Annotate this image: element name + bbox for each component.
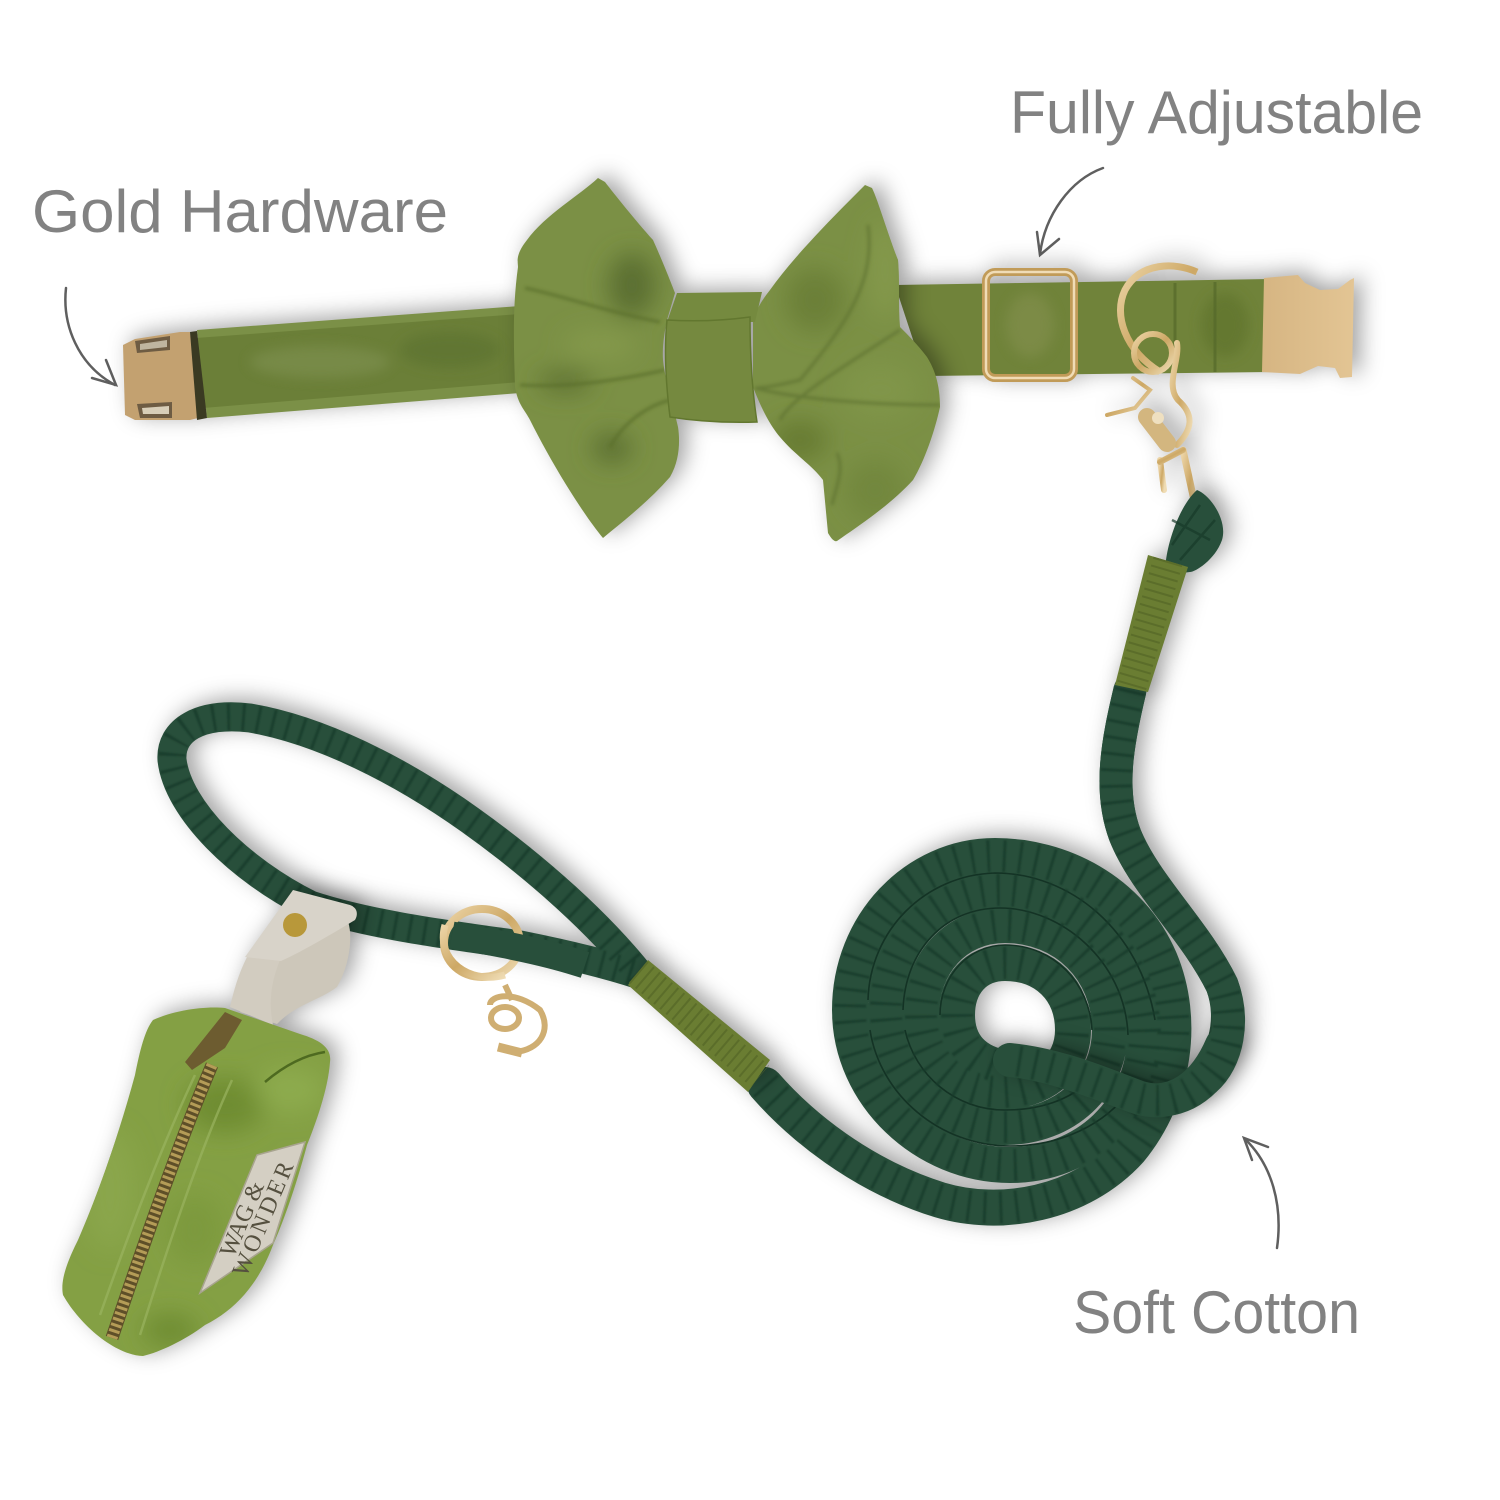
arrow: to gold buckle — [65, 288, 116, 385]
rope twist — [1010, 690, 1228, 1100]
leather suede back — [240, 915, 350, 1024]
label text: WAG & — [215, 1177, 270, 1261]
brass rivet — [283, 913, 307, 937]
arrow: to rope — [1244, 1138, 1279, 1248]
coil gaps — [868, 873, 1155, 1146]
collar pleats — [1175, 282, 1215, 372]
gold charm — [490, 985, 545, 1053]
slider ring — [986, 272, 1074, 378]
zipper pull — [185, 1012, 242, 1070]
bow knot — [666, 317, 757, 422]
collar band right — [895, 279, 1270, 376]
label: soft cotton: Soft Cotton — [1073, 1279, 1360, 1346]
bow left wing — [500, 170, 690, 550]
poop bag pouch — [50, 890, 357, 1365]
lower sleeve stitching — [638, 972, 760, 1076]
collar band left — [197, 306, 520, 418]
arrow: to adjuster — [1037, 168, 1103, 255]
handle rope — [172, 717, 640, 975]
rope segment down to coil — [1116, 690, 1227, 1088]
leash handle loop — [172, 717, 640, 975]
upper rope base — [1116, 690, 1227, 1088]
sleeve upper — [1115, 555, 1188, 692]
top knot and olive sleeve — [1115, 490, 1223, 692]
rope knot — [1165, 490, 1223, 575]
snap hook pivot — [1152, 412, 1164, 424]
sleeve herringbone — [1131, 561, 1168, 688]
coil spiral — [765, 856, 1173, 1208]
ring front — [443, 925, 505, 977]
sleeve lower — [628, 960, 770, 1092]
label text second line: WONDER — [228, 1158, 299, 1280]
knot twist — [1172, 505, 1215, 560]
rope solid — [1010, 690, 1228, 1100]
bow tie — [500, 170, 950, 550]
collar — [123, 266, 1354, 514]
velvet highlights — [250, 293, 1249, 378]
leather flap — [245, 890, 357, 961]
leather strap — [230, 957, 280, 1025]
zipper — [112, 1065, 212, 1338]
rope over ring — [452, 935, 585, 965]
left buckle — [123, 331, 207, 420]
rope above coil with twist — [1010, 690, 1228, 1100]
woven label — [200, 1142, 305, 1293]
pouch body — [50, 1000, 340, 1365]
coil — [765, 856, 1173, 1208]
right buckle — [1262, 275, 1354, 378]
product infographic — [35, 90, 1420, 1364]
handle twist — [172, 717, 640, 975]
snap hook — [1107, 334, 1197, 514]
top strand crossing coil — [1010, 1045, 1222, 1100]
label: fully adjustable: Fully Adjustable — [1010, 79, 1423, 146]
bow knot back band — [667, 292, 762, 322]
label: gold hardware: Gold Hardware — [32, 178, 448, 245]
gold ring — [444, 909, 520, 977]
coil twist lines — [765, 856, 1173, 1208]
d-ring — [1120, 266, 1197, 372]
bow right wing — [745, 175, 950, 550]
